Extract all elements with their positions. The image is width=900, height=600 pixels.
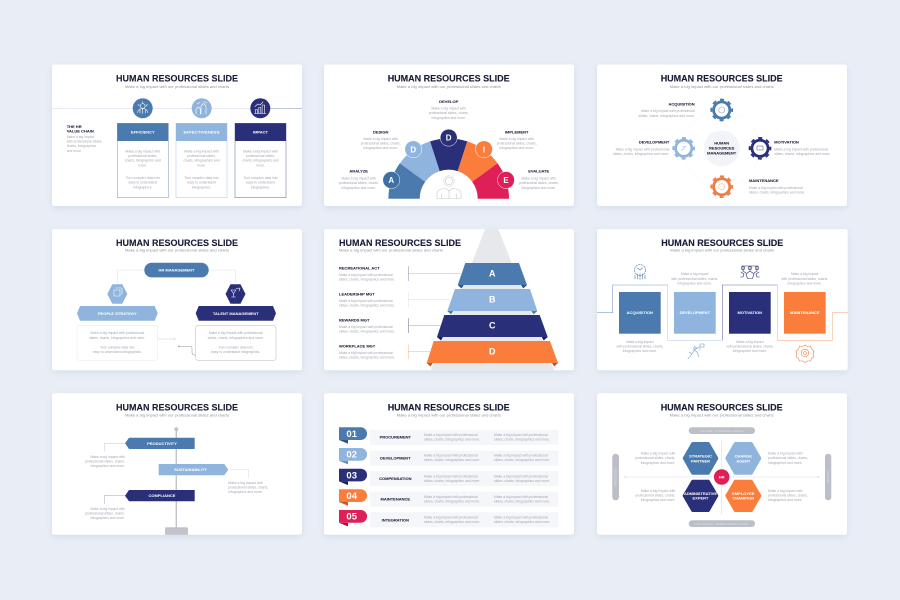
pill: HR management [144,263,209,277]
text: motivation: with professional slides, charts, [727,344,774,348]
text: acquisition [617,340,664,353]
label: rewards mgt: REWARDS MGT [339,317,370,322]
row 03 compensation [339,469,558,486]
row 01 procurement: 01 [346,429,358,440]
sign: compliance [125,490,195,501]
title: HUMAN RESOURCES SLIDE [116,74,238,84]
text box: people strategy: Make a big impact with professional [90,331,144,335]
text: maintenance: infographics and more. [787,282,822,286]
tier C [437,315,548,340]
label: maintenance: MAINTENANCE [749,178,779,183]
card: efficiency: more. [138,163,147,167]
icon: person with gear [437,176,461,198]
label: design [361,129,401,150]
pill: left: PROCESSES [614,468,618,486]
left intro text: Make a big impact [67,135,94,139]
label: workplace mgt: slides, charts, infographics and more. [339,356,395,360]
pyramid backdrop [431,229,554,370]
center circle: RESOURCES [709,146,735,151]
square: acquisition [619,292,661,334]
panel: HR management flow [52,229,302,370]
title: HUMAN RESOURCES SLIDE [661,402,783,412]
label: analyze: Make a big impact with [341,176,376,180]
text: sustainability: Make a big impact with [228,481,263,485]
dashed orbit [684,110,760,186]
row 01 procurement [339,427,558,445]
text box: people strategy: easy to understand infographics. [93,350,142,354]
card: impact: infographics. [251,185,270,189]
square: acquisition: ACQUISITION [627,310,653,315]
hexagon: employee champion: CHAMPION [732,496,754,501]
badge D: D [410,145,416,154]
connectors [104,443,249,504]
text: sustainability: infographics and more. [228,490,263,494]
row 02 development: slides, charts, infographics and more. [494,458,550,462]
label: rewards mgt: slides, charts, infographics and more. [339,330,395,334]
card: impact: more. [256,163,265,167]
card: impact: easy to understand [246,181,275,185]
text: upper right: Make a big impact with [768,452,803,456]
pill: bottom [689,520,755,527]
banner: people strategy [77,306,158,321]
row 05 integration: Make a big impact with professional [424,516,478,520]
hexagon: change agent: AGENT [736,458,751,463]
row 05 integration [339,510,558,527]
panel: stepped process [597,229,848,370]
card: efficiency: easy to understand [128,181,157,185]
panel: ADDIE semicircle [324,64,574,206]
label: leadership mgt [339,291,395,308]
text box: people strategy: slides, charts, infographics and more. [89,336,145,340]
center badge HR [713,469,730,485]
badge D top: D [446,134,452,143]
text: lower right: professional slides, charts, [768,494,808,498]
label: implement: IMPLEMENT [505,129,529,134]
label: maintenance: slides, charts, infographics and more. [749,190,805,194]
text: upper left: infographics and more. [641,461,675,465]
card: impact [235,123,286,198]
axes [624,440,819,514]
text: development [671,272,718,286]
text: lower left: infographics and more. [641,498,675,502]
label: recreational act [339,265,395,282]
label: leadership mgt: slides, charts, infographics and more. [339,304,395,308]
label: recreational act: Make a big impact with professional [339,273,393,277]
subtitle: Make a big impact with our professional slides and charts [125,85,229,89]
text: sustainability [228,481,268,494]
badge I: I [483,145,485,154]
hexagon: employee champion [727,481,760,510]
sign: sustainability [159,464,228,475]
row 03 compensation: Make a big impact with professional [494,474,548,478]
pill: right: PEOPLE [826,471,830,483]
panel: pyramid [324,229,574,370]
row 01 procurement: slides, charts, infographics and more. [424,438,480,442]
text: development: infographics and more. [677,282,712,286]
label: workplace mgt: WORKPLACE MGT [339,343,376,348]
row 03 compensation: slides, charts, infographics and more. [494,479,550,483]
pill: HR management: HR MANAGEMENT [158,268,195,272]
text: sustainability: professional slides, charts, [228,486,268,490]
text: acquisition: with professional slides, charts, [617,344,664,348]
row 04 maintenance: slides, charts, infographics and more. [494,500,550,504]
label: rewards mgt [339,317,395,334]
badge D top [440,129,457,146]
left intro text: charts, infographics [67,144,96,148]
hexagon: change agent: CHANGE [735,454,752,459]
icon: climber with flag [688,344,704,359]
label: implement: Make a big impact with [499,137,534,141]
text: motivation: infographics and more. [733,349,767,353]
label: acquisition: ACQUISITION [668,101,695,106]
tier B [447,289,537,314]
arrow: to center right [158,338,176,340]
card: efficiency: Turn complex data into [126,176,160,180]
row 02 development [339,448,558,466]
square: motivation [729,292,771,334]
panel: HR value chain [52,64,302,206]
gear: acquisition [711,100,732,120]
title: HUMAN RESOURCES SLIDE [116,238,238,248]
row 04 maintenance: slides, charts, infographics and more. [424,500,480,504]
subtitle: Make a big impact with our professional slides and charts [125,414,229,418]
row 05 integration: 05 [346,512,358,523]
center circle: MANAGEMENT [707,151,737,156]
row 04 maintenance: Make a big impact with professional [494,495,548,499]
row 03 compensation: Make a big impact with professional [424,474,478,478]
sign: productivity [125,438,195,449]
text: compliance: professional slides, charts, [85,512,125,516]
card: efficiency: EFFICIENCY [131,130,155,135]
row 03 compensation: slides, charts, infographics and more. [424,479,480,483]
label: develop: infographics and more. [431,116,466,120]
row 01 procurement: Make a big impact with professional [424,433,478,437]
label: motivation: Make a big impact with professional [774,148,828,152]
semicircle chart [388,138,509,199]
text box: talent management: easy to understand infographics. [211,350,260,354]
left intro text: with professional slides, [67,140,103,144]
card: efficiency: infographics. [133,185,152,189]
sign: compliance: COMPLIANCE [149,493,176,498]
card: efficiency: charts, infographics and [125,159,161,163]
row 04 maintenance: Make a big impact with professional [424,495,478,499]
text: upper left: professional slides, charts, [635,456,675,460]
label: design: Make a big impact with [363,137,398,141]
icon: badge flower [796,345,814,362]
text: lower right [768,489,808,502]
label: workplace mgt [339,343,395,360]
row 02 development: Make a big impact with professional [424,454,478,458]
text: motivation: Make a big impact [736,340,764,344]
leader lines [408,266,462,359]
pill: left [612,454,619,500]
text box: people strategy: Turn complex data into [100,346,135,350]
text box: talent management [196,325,276,360]
row 04 maintenance [339,489,558,507]
label: development: slides, charts, infographics and more. [613,152,669,156]
text: productivity: Make a big impact with [90,455,125,459]
square: motivation: MOTIVATION [738,310,762,315]
subtitle: Make a big impact with our professional slides and charts [670,85,774,89]
text: upper left [635,452,675,465]
tier A: A [489,268,496,278]
label: acquisition: slides, charts, infographics and more. [639,114,695,118]
label: evaluate: professional slides, charts, [519,181,559,185]
badge D [405,141,422,158]
tier B: B [489,294,496,304]
panel: signpost [52,393,302,535]
hexagon: strategic partner [684,444,717,473]
gear: development [673,138,694,159]
sign: sustainability: SUSTAINABILITY [174,467,207,472]
text: acquisition: infographics and more. [623,349,657,353]
text: productivity: infographics and more. [90,464,125,468]
left intro text: and more. [67,149,82,153]
label: acquisition: Make a big impact with professional [641,109,695,113]
badge A: A [388,176,394,185]
left intro text: VALUE CHAIN [67,128,94,134]
tier D [427,341,558,366]
row 05 integration: INTEGRATION [382,517,409,522]
panel: numbered table [324,393,574,535]
card: effectiveness: easy to understand [187,181,216,185]
card: effectiveness: more. [197,163,206,167]
label: acquisition [639,101,695,118]
label: design: infographics and more. [363,146,398,150]
square: maintenance: MAINTENANCE [790,310,820,315]
row 04 maintenance: MAINTENANCE [381,497,410,502]
row 02 development: slides, charts, infographics and more. [424,458,480,462]
tier D: D [489,346,496,356]
icon: people network [740,266,760,278]
hexagon: employee champion: EMPLOYEE [732,491,755,496]
text box: talent management: slides, charts, infographics and more. [208,336,264,340]
text: acquisition: Make a big impact [626,340,654,344]
icon: effectiveness [192,98,212,118]
text: lower right: Make a big impact with [768,489,803,493]
arrow: to center left [178,345,196,355]
banner: talent management [196,306,276,321]
label: implement: professional slides, charts, [497,142,537,146]
subtitle: Make a big impact with our professional slides and charts [670,249,774,253]
text: productivity [85,455,125,468]
label: analyze: professional slides, charts, [339,181,379,185]
center badge HR: HR [719,474,725,480]
title: HUMAN RESOURCES SLIDE [116,402,238,412]
text: compliance: infographics and more. [90,516,125,520]
text: lower left [635,489,675,502]
hexagon: strategic partner: STRATEGIC [689,454,712,459]
hexagon: change agent [727,444,760,473]
label: evaluate: EVALUATE [528,169,550,174]
label: maintenance [749,178,805,194]
label: maintenance: Make a big impact with professional [749,186,803,190]
text: lower right: infographics and more. [768,498,803,502]
connectors [117,270,236,283]
text: lower left: Make a big impact with [641,489,675,493]
text: motivation [727,340,774,353]
panel: HR management gears [597,64,847,206]
label: design: DESIGN [373,129,388,134]
left intro text: THE HR [67,124,82,129]
card: impact: Turn complex data into [243,176,278,180]
panel: HR roles matrix [597,393,847,535]
square: development [674,292,716,334]
label: development [613,140,670,156]
title: HUMAN RESOURCES SLIDE [339,238,461,248]
label: recreational act: RECREATIONAL ACT [339,265,380,270]
card: effectiveness: professional slides, [187,154,216,158]
badge E [498,172,514,188]
text: maintenance: Make a big impact [791,272,819,276]
label: rewards mgt: Make a big impact with professional [339,325,393,329]
card: impact: professional slides, [246,154,275,158]
icon: efficiency [133,98,153,118]
text: upper left: Make a big impact with [641,452,675,456]
banner: talent management: TALENT MANAGEMENT [213,311,259,316]
title: HUMAN RESOURCES SLIDE [661,74,783,84]
signpost pole [165,427,188,535]
subtitle: Make a big impact with our professional slides and charts [397,414,501,418]
label: workplace mgt: Make a big impact with professional [339,351,393,355]
card: effectiveness: charts, infographics and [184,159,220,163]
card: efficiency [117,123,168,198]
subtitle: Make a big impact with our professional slides and charts [125,249,229,253]
row 05 integration: slides, charts, infographics and more. [494,520,550,524]
label: leadership mgt: Make a big impact with professional [339,299,393,303]
label: development: Make a big impact with professional [616,148,670,152]
left intro text [67,124,103,153]
card: effectiveness: Turn complex data into [184,176,219,180]
text: development: with professional slides, charts, [671,277,718,281]
center circle: HUMAN [714,141,729,146]
badge E: E [503,176,509,185]
label: motivation: MOTIVATION [774,140,799,145]
card: efficiency: Make a big impact with [126,149,160,153]
center circle [704,130,740,166]
row 03 compensation: 03 [346,470,357,481]
text: compliance: Make a big impact with [90,507,125,511]
label: leadership mgt: LEADERSHIP MGT [339,291,375,296]
stepped line [597,285,848,340]
label: evaluate: Make a big impact with [521,176,556,180]
row 05 integration: Make a big impact with professional [494,516,548,520]
card: impact: charts, infographics and [242,159,279,163]
text: maintenance [781,272,828,286]
label: motivation [774,140,831,156]
label: analyze: infographics and more. [341,186,376,190]
label: develop: Make a big impact with [431,106,466,110]
square: development: DEVELOPMENT [680,310,711,315]
label: implement: infographics and more. [499,146,534,150]
sign: productivity: PRODUCTIVITY [147,441,177,446]
badge A [383,172,400,188]
text: productivity: professional slides, charts, [85,460,125,464]
row 03 compensation: COMPENSATION [379,476,412,481]
text box: talent management: Make a big impact with professional [209,331,263,335]
pill: top [689,427,755,434]
hexagon: administrative expert [684,481,717,510]
text: upper right [768,452,808,465]
label: develop: DEVELOP [439,99,459,104]
row 04 maintenance: 04 [346,491,358,502]
text: upper right: professional slides, charts, [768,456,808,460]
label: motivation: slides, charts, infographics and more. [774,152,831,156]
card: effectiveness: EFFECTIVENESS [184,130,220,135]
title: HUMAN RESOURCES SLIDE [388,74,510,84]
badge I [476,141,492,158]
text: development: Make a big impact [681,272,709,276]
hexagon: administrative expert: ADMINISTRATIVE [684,491,717,496]
text: upper right: infographics and more. [768,461,803,465]
icon: team head [634,264,646,280]
card: impact: Make a big impact with [243,149,278,153]
gear: motivation [750,138,770,159]
icon: impact [250,98,270,118]
text: maintenance: with professional slides, charts, [781,277,828,281]
row 02 development: Make a big impact with professional [494,454,548,458]
hexagon icon: people strategy [107,284,127,304]
title: HUMAN RESOURCES SLIDE [661,238,783,248]
timeline line [52,107,260,109]
card: effectiveness: infographics. [192,185,211,189]
hexagon: administrative expert: EXPERT [692,496,709,501]
label: recreational act: slides, charts, infographics and more. [339,278,395,282]
label: develop: professional slides, charts, [429,111,469,115]
subtitle: Make a big impact with our professional slides and charts [670,414,774,418]
label: evaluate [519,169,559,190]
title: HUMAN RESOURCES SLIDE [388,402,510,412]
subtitle: Make a big impact with our professional slides and charts [339,249,443,253]
subtitle: Make a big impact with our professional slides and charts [397,85,501,89]
tier A [458,263,527,288]
row 01 procurement: slides, charts, infographics and more. [494,438,550,442]
gear: maintenance [711,176,732,197]
label: development: DEVELOPMENT [639,140,670,145]
card: effectiveness [176,123,227,198]
text: compliance [85,507,125,520]
row 02 development: 02 [346,450,357,461]
label: analyze [339,169,379,190]
label: develop [429,99,469,120]
pill: bottom: DAY-TO-DAY / OPERATIONAL FOCUS [696,522,748,526]
hexagon icon: talent management [226,284,246,304]
pill: right [825,454,831,500]
hexagon: strategic partner: PARTNER [691,458,710,463]
timeline line end [260,107,302,109]
row 01 procurement: PROCUREMENT [380,435,412,440]
card: impact: IMPACT [253,130,269,135]
text: lower left: professional slides, charts, [635,494,675,498]
label: implement [497,129,537,150]
card: effectiveness: Make a big impact with [184,149,219,153]
label: analyze: ANALYZE [349,169,368,174]
row 05 integration: slides, charts, infographics and more. [424,520,480,524]
label: design: professional slides, charts, [361,142,401,146]
text box: people strategy [77,325,158,360]
text box: talent management: Turn complex data into [219,346,253,350]
row 02 development: DEVELOPMENT [380,455,411,460]
label: evaluate: infographics and more. [521,186,556,190]
tier C: C [489,320,496,330]
banner: people strategy: PEOPLE STRATEGY [98,311,137,316]
row 01 procurement: Make a big impact with professional [494,433,548,437]
card: efficiency: professional slides, [128,154,157,158]
square: maintenance [784,292,826,334]
pill: top: FUTURE / STRATEGIC FOCUS [700,429,743,433]
